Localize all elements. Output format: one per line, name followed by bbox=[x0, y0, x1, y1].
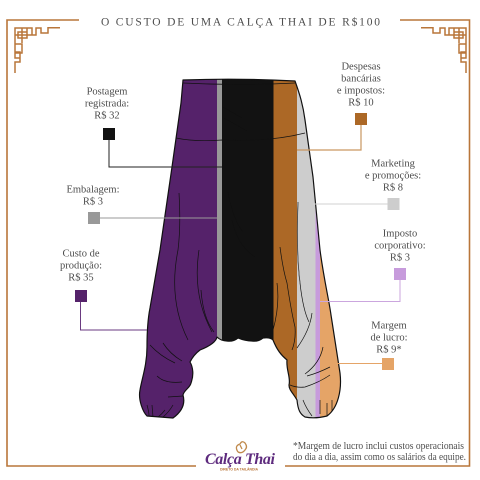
label: marketing bbox=[365, 158, 421, 210]
label: despesas bancárias: R$ 10 bbox=[348, 98, 374, 108]
pants illustration bbox=[138, 78, 342, 419]
label: postagem registrada: R$ 32 bbox=[94, 110, 120, 122]
label: marketing: Marketing bbox=[371, 158, 416, 170]
swatch: custo de produção bbox=[75, 290, 87, 302]
label: custo de produção: produção: bbox=[60, 260, 102, 272]
label: postagem registrada: Postagem bbox=[87, 86, 127, 98]
pants outline bbox=[140, 79, 340, 418]
logo wordmark: Calça Thai bbox=[205, 451, 276, 468]
label: margem de lucro: Margem bbox=[371, 320, 407, 332]
leader: despesas bbox=[297, 119, 361, 150]
logo icon bbox=[236, 442, 246, 453]
corner ornament: top left bbox=[15, 28, 60, 73]
title: O CUSTO DE UMA CALÇA THAI DE R$100 bbox=[101, 16, 380, 28]
leader: postagem registrada bbox=[109, 134, 222, 167]
swatch: embalagem bbox=[88, 212, 100, 224]
swatch: despesas bbox=[355, 113, 367, 125]
pants folds and waistband bbox=[147, 83, 332, 417]
label: custo de produção: Custo de bbox=[62, 248, 100, 260]
logo bbox=[205, 442, 276, 472]
gray leg fold bbox=[297, 202, 300, 283]
pants colour bands bbox=[140, 80, 340, 418]
corner ornament: top right bbox=[421, 28, 466, 73]
label: imposto corporativo: corporativo: bbox=[374, 240, 426, 252]
label: embalagem: R$ 3 bbox=[83, 196, 103, 208]
label: custo de produção: R$ 35 bbox=[68, 272, 94, 284]
swatch: postagem bbox=[103, 128, 115, 140]
label: margem de lucro: de lucro: bbox=[370, 332, 408, 344]
leader: marketing bbox=[313, 203, 393, 205]
label: marketing: R$ 8 bbox=[383, 182, 403, 194]
label: margem de lucro: R$ 9* bbox=[376, 344, 402, 356]
label: despesas bancárias: e impostos: bbox=[337, 86, 385, 96]
label: imposto corporativo: Imposto bbox=[383, 228, 417, 240]
label: despesas bancárias bbox=[337, 62, 385, 125]
label: despesas bancárias: bancárias bbox=[341, 74, 381, 84]
footnote: *Margem de lucro inclui custos operacionais bbox=[293, 441, 464, 452]
swatch: imposto corporativo bbox=[394, 268, 406, 280]
label: margem de lucro bbox=[370, 320, 408, 370]
label: embalagem: Embalagem: bbox=[66, 184, 120, 196]
label: imposto corporativo bbox=[374, 228, 426, 280]
footnote bbox=[293, 441, 466, 463]
swatch: marketing bbox=[388, 198, 400, 210]
label: despesas bancárias: Despesas bbox=[341, 62, 381, 72]
leader: imposto corporativo bbox=[320, 274, 400, 302]
swatch: margem de lucro bbox=[382, 358, 394, 370]
label: custo de produção bbox=[60, 248, 102, 302]
leader: embalagem bbox=[94, 217, 217, 219]
label: postagem registrada bbox=[85, 86, 129, 140]
label: marketing: e promoções: bbox=[365, 170, 421, 182]
label: postagem registrada: registrada: bbox=[85, 98, 129, 110]
leader: custo de produção bbox=[80, 296, 147, 330]
logo tagline: DIRETO DA TAILÂNDIA bbox=[220, 466, 258, 472]
label: imposto corporativo: R$ 3 bbox=[390, 252, 410, 264]
footnote: do dia a dia, assim como os salários da equipe. bbox=[293, 452, 466, 463]
leader: margem de lucro bbox=[337, 362, 388, 364]
label: embalagem bbox=[66, 184, 120, 224]
